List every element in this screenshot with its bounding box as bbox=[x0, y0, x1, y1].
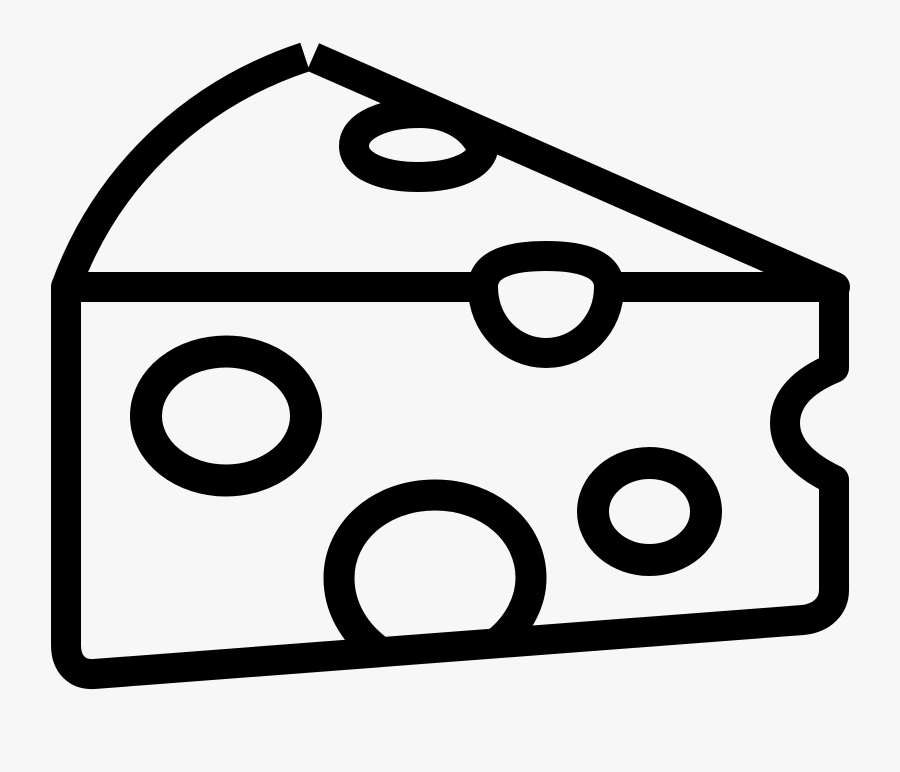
hole: right ellipse bbox=[593, 463, 706, 560]
wedge body outline with notch bbox=[66, 287, 834, 674]
top arc of wedge bbox=[66, 57, 305, 287]
hole: top face ellipse bbox=[354, 113, 483, 177]
hole: half circle on edge bbox=[483, 256, 609, 353]
hole: left ellipse bbox=[146, 352, 306, 480]
horizontal top face edge bbox=[66, 272, 835, 302]
top slanted edge bbox=[313, 57, 835, 287]
hole: bottom circle bbox=[339, 495, 531, 652]
